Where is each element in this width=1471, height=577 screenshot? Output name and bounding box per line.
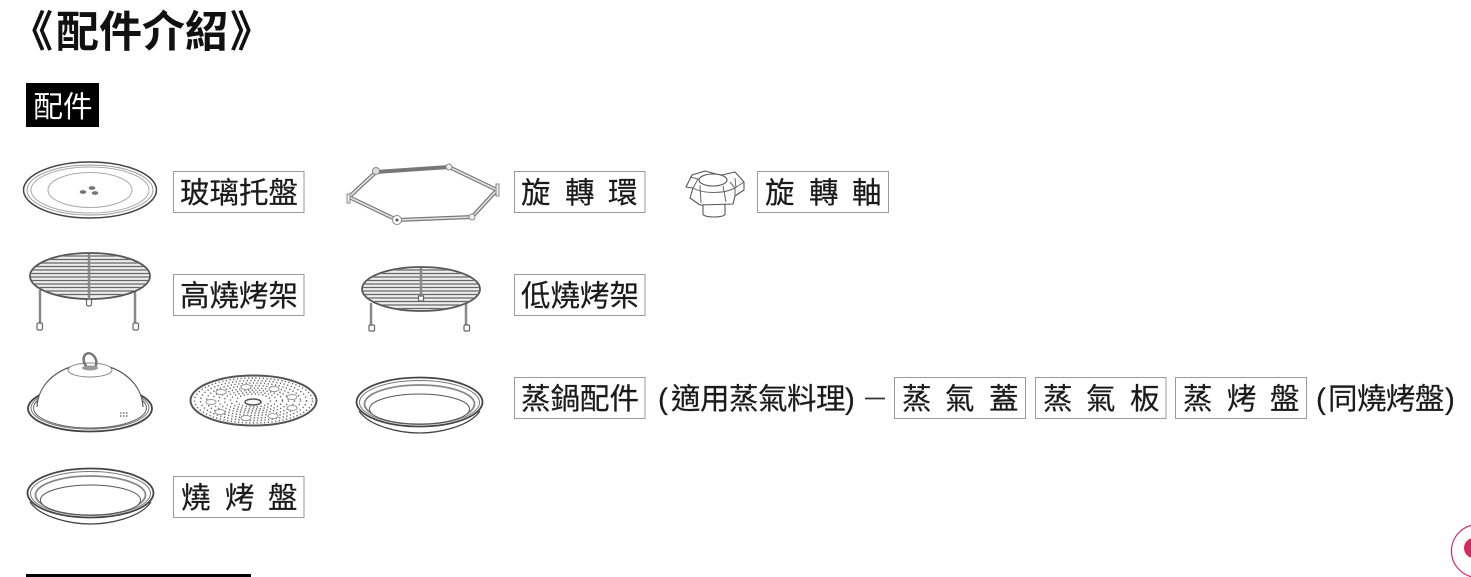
section tag: accessories: 配件	[34, 91, 93, 124]
label: steam lid: 蒸氣蓋	[902, 383, 1019, 416]
icon: rotating shaft	[686, 171, 744, 217]
label: high grill rack: 高燒烤架	[180, 280, 298, 313]
label: roasting tray: 燒烤盤	[181, 482, 298, 515]
title: 《配件介紹》	[10, 9, 273, 57]
dash	[865, 398, 885, 400]
icon: steam lid	[28, 351, 152, 432]
note: same as roasting tray: (同燒烤盤)	[1316, 383, 1455, 416]
label: low grill rack: 低燒烤架	[521, 280, 639, 313]
icon: roasting tray	[28, 468, 154, 524]
label: rotating ring: 旋轉環	[521, 177, 638, 210]
icon: rotating ring	[347, 164, 499, 224]
icon: glass tray	[24, 162, 156, 218]
bottom rule	[26, 574, 251, 577]
label: steamer accessories: 蒸鍋配件	[521, 383, 639, 416]
floating button	[1452, 524, 1471, 577]
label: steam plate: 蒸氣板	[1043, 383, 1160, 416]
icon: steam plate	[190, 376, 316, 426]
label: rotating shaft: 旋轉軸	[765, 177, 882, 210]
label: steam roasting tray: 蒸烤盤	[1183, 383, 1300, 416]
label: glass tray: 玻璃托盤	[180, 177, 298, 210]
icon: high grill rack	[30, 253, 150, 330]
icon: steam roasting tray	[356, 378, 482, 433]
section tag: accessories	[26, 83, 99, 127]
icon: low grill rack	[360, 267, 482, 331]
note: for steam cooking: (適用蒸氣料理)	[658, 383, 855, 416]
